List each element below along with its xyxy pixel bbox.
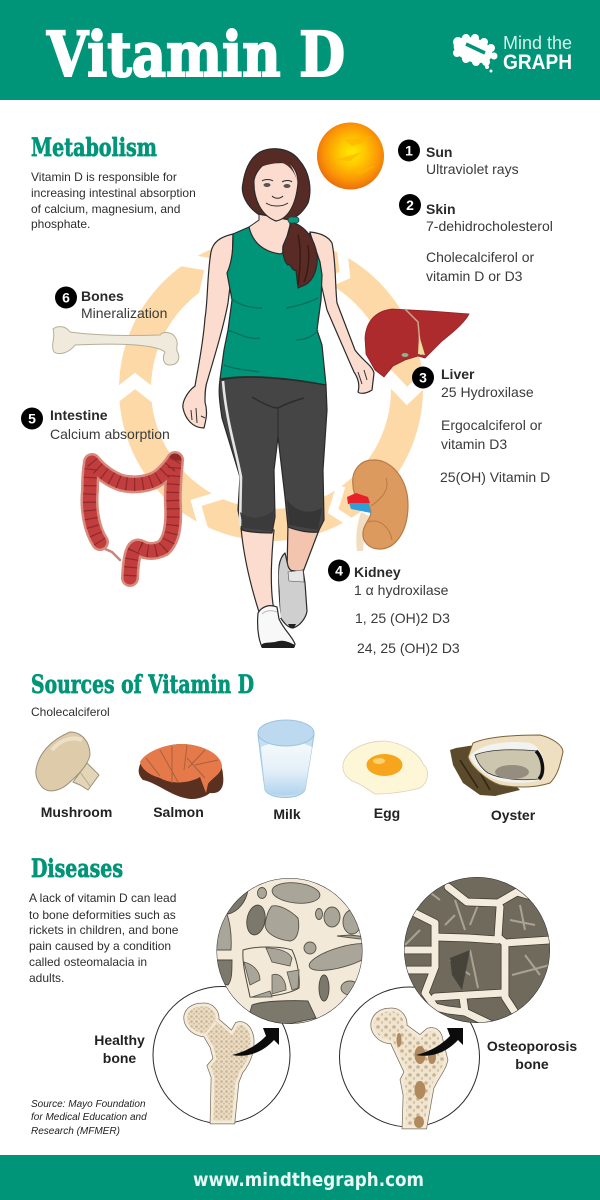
trousers [219, 377, 327, 533]
metabolism heading: Metabolism [31, 133, 157, 162]
label 5: intestine: Intestine [50, 407, 108, 423]
source note: Research (MFMER) [31, 1126, 120, 1137]
label 4: kidney: 24, 25 (OH)2 D3 [357, 640, 460, 656]
label: oyster: Oyster [491, 807, 536, 823]
label 6: bones: 6 [62, 290, 70, 306]
header band [0, 0, 600, 100]
sources subtitle: Cholecalciferol [31, 705, 110, 719]
label 1: sun: 1 [405, 142, 413, 158]
label 4: kidney: 1 α hydroxilase [354, 582, 449, 598]
healthy bone magnified [216, 878, 362, 1024]
diseases description: adults. [29, 971, 64, 985]
label 1: sun [398, 140, 519, 177]
label 5: intestine: 5 [28, 410, 36, 426]
metabolism description: Vitamin D is responsible for [31, 170, 177, 184]
label: salmon: Salmon [153, 804, 204, 820]
diseases description: rickets in children, and bone [29, 923, 179, 937]
food: milk [258, 720, 314, 798]
face [254, 149, 298, 221]
label 4: kidney [328, 560, 460, 656]
organ: kidney [347, 460, 408, 551]
hair back [242, 149, 310, 220]
title: Vitamin D [46, 18, 345, 91]
food: egg [343, 741, 428, 794]
arms [183, 232, 374, 428]
metabolism description: phosphate. [31, 217, 90, 231]
metabolic cycle arrows [108, 248, 430, 534]
organ: intestine [89, 460, 175, 578]
label 3: liver: 25(OH) Vitamin D [440, 469, 550, 485]
label 6: bones: Bones [81, 288, 124, 304]
neck and chest [249, 210, 290, 255]
label 3: liver: 3 [419, 370, 427, 386]
label 6: bones: Mineralization [81, 305, 167, 321]
label 3: liver: 25 Hydroxilase [441, 384, 534, 400]
label: milk: Milk [273, 806, 301, 822]
arrow: healthy magnify [232, 1028, 279, 1056]
label: healthy bone: bone [103, 1050, 136, 1066]
label 1: sun: Sun [426, 144, 452, 160]
source note: Source: Mayo Foundation [31, 1099, 146, 1110]
tank top [220, 227, 326, 385]
label 2: skin [399, 194, 553, 284]
label 3: liver: vitamin D3 [441, 436, 507, 452]
food: salmon [139, 744, 223, 799]
label: mushroom: Mushroom [41, 804, 112, 820]
label 4: kidney: 4 [335, 562, 343, 578]
label 5: intestine [21, 407, 170, 442]
organ: liver [365, 309, 469, 377]
diseases description: pain caused by a condition [29, 939, 171, 953]
label 4: kidney: 1, 25 (OH)2 D3 [355, 610, 450, 626]
far leg and grey shoe [277, 524, 319, 628]
label: egg: Egg [374, 805, 400, 821]
diseases description: to bone deformities such as [29, 908, 176, 922]
diseases description: A lack of vitamin D can lead [29, 891, 176, 905]
organ: bone [53, 327, 179, 365]
food: oyster [450, 735, 563, 796]
osteoporosis femur circle [340, 987, 480, 1128]
label 2: skin: vitamin D or D3 [426, 268, 523, 284]
label: healthy bone: Healthy [94, 1032, 145, 1048]
label 4: kidney: Kidney [354, 564, 401, 580]
label 2: skin: 7-dehidrocholesterol [426, 218, 553, 234]
label 3: liver [412, 366, 550, 485]
healthy femur circle [153, 986, 290, 1124]
figure: woman walking [183, 149, 374, 648]
logo: Mind the Graph [450, 32, 572, 74]
label 3: liver: Liver [441, 366, 475, 382]
label 1: sun: Ultraviolet rays [426, 161, 519, 177]
label 2: skin: Cholecalciferol or [426, 249, 534, 265]
diseases heading: Diseases [31, 854, 123, 883]
label 6: bones [55, 286, 167, 321]
label: osteoporosis bone: Osteoporosis [487, 1038, 577, 1054]
arrow: osteoporosis magnify [416, 1028, 463, 1056]
near white shoe [258, 606, 295, 648]
sources heading: Sources of Vitamin D [31, 670, 254, 699]
diseases description: called osteomalacia in [29, 955, 147, 969]
label: osteoporosis bone: bone [515, 1056, 549, 1072]
label 2: skin: Skin [426, 201, 456, 217]
metabolism description: of calcium, magnesium, and [31, 202, 180, 216]
osteoporotic bone magnified [403, 877, 552, 1024]
icon: sun [317, 122, 384, 190]
label 2: skin: 2 [406, 197, 414, 213]
footer band: www.mindthegraph.com [193, 1169, 424, 1191]
logo: Mind the Graph: GRAPH [503, 51, 572, 74]
label 5: intestine: Calcium absorption [50, 426, 170, 442]
footer band [0, 1155, 600, 1200]
source note: for Medical Education and [31, 1112, 147, 1123]
logo: Mind the Graph: Mind the [503, 33, 572, 53]
food: mushroom [36, 732, 99, 791]
ponytail [283, 217, 317, 288]
label 3: liver: Ergocalciferol or [441, 417, 542, 433]
metabolism description: increasing intestinal absorption [31, 186, 196, 200]
near leg [241, 528, 274, 612]
